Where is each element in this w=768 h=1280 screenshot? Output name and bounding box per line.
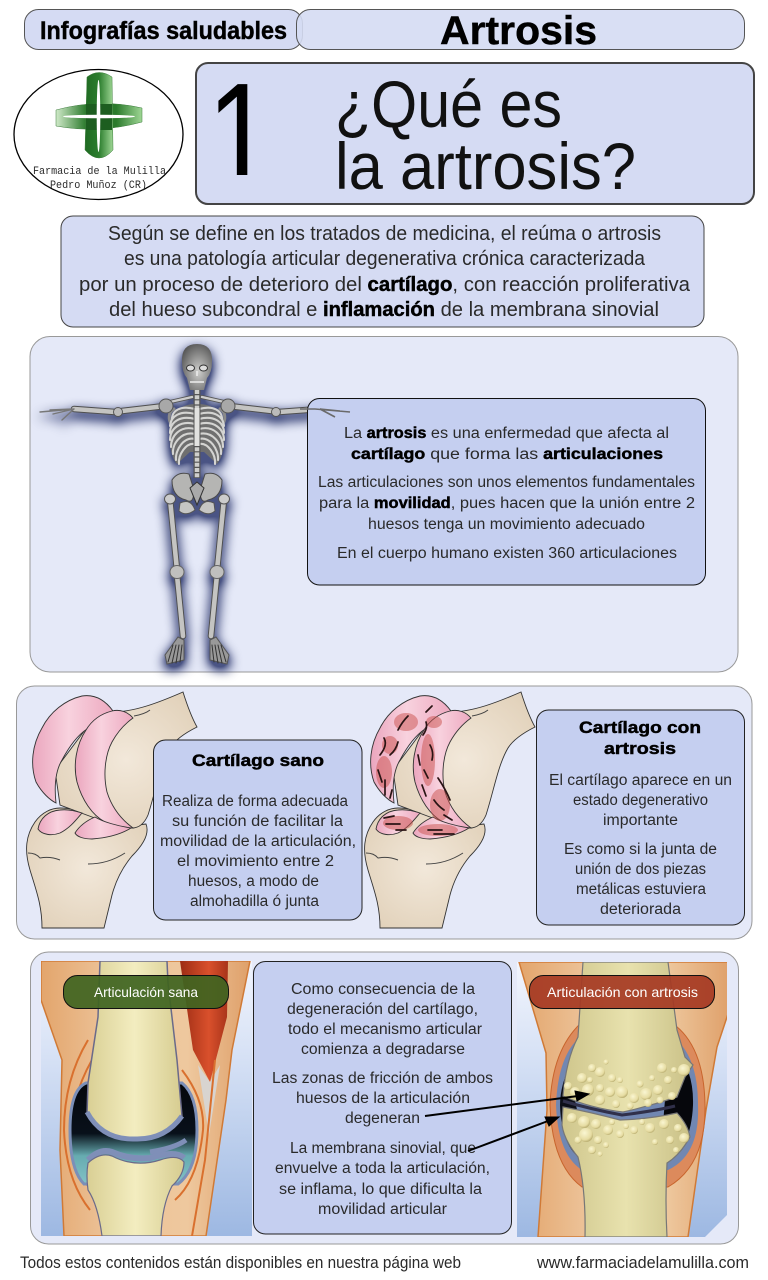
arthritic cartilage box: artrosis bbox=[604, 740, 676, 758]
arthritic cartilage box: unión de dos piezas bbox=[575, 861, 706, 878]
centre explanation box bbox=[254, 962, 512, 1234]
panel: skeleton and joints bbox=[30, 336, 738, 672]
centre explanation box: comienza a degradarse bbox=[301, 1041, 465, 1058]
centre explanation box: La membrana sinovial, que bbox=[290, 1140, 476, 1157]
logo: Farmacia de la Mulilla bbox=[14, 70, 183, 200]
healthy cartilage box: movilidad de la articulación, bbox=[160, 833, 356, 850]
intro definition box: Según se define en los tratados de medicina, el reúma o artrosis bbox=[108, 223, 661, 245]
joints text box: cartílago que forma las articulaciones bbox=[351, 446, 663, 463]
illustration: arthritic knee cartilage bbox=[365, 692, 535, 928]
arthritic cartilage box: deteriorada bbox=[600, 901, 681, 918]
skeleton illustration bbox=[40, 344, 354, 664]
label pill: Articulación sana bbox=[64, 976, 228, 1008]
header pill: Infografías saludables: Infografías saludables bbox=[40, 17, 287, 45]
right hand overlapping the box bbox=[300, 409, 350, 417]
logo: Farmacia de la Mulilla: Pedro Muñoz (CR) bbox=[50, 180, 147, 192]
healthy cartilage box: Cartílago sano bbox=[192, 752, 324, 770]
arrow: synovial membrane bbox=[468, 1117, 559, 1151]
joints text box: Las articulaciones son unos elementos fundamentales bbox=[318, 474, 695, 491]
intro definition box: es una patología articular degenerativa crónica caracterizada bbox=[124, 248, 646, 270]
label pill: Articulación con artrosis bbox=[530, 976, 714, 1008]
centre explanation box: Como consecuencia de la bbox=[291, 981, 475, 998]
arthritic cartilage box: Cartílago con bbox=[579, 719, 701, 737]
header pill: Artrosis: Artrosis bbox=[440, 9, 597, 53]
title: ¿Qué es la artrosis? bbox=[335, 67, 636, 203]
panel: joint comparison bbox=[30, 952, 738, 1244]
centre explanation box: movilidad articular bbox=[318, 1201, 447, 1218]
centre explanation box: huesos de la articulación bbox=[296, 1090, 470, 1107]
label pill: Articulación sana: Articulación sana bbox=[94, 984, 198, 1000]
healthy cartilage box bbox=[154, 740, 362, 920]
title panel bbox=[195, 62, 755, 205]
centre explanation box: Las zonas de fricción de ambos bbox=[272, 1070, 493, 1087]
header pill: Artrosis bbox=[296, 9, 744, 53]
illustration: arthritic joint bbox=[517, 962, 730, 1237]
illustration: healthy knee cartilage bbox=[27, 692, 197, 928]
footer text left: Todos estos contenidos están disponibles en nuestra página web bbox=[20, 1254, 461, 1272]
joints text box bbox=[308, 398, 706, 585]
icon: green cross of rings bbox=[56, 72, 142, 158]
section number: 1 bbox=[207, 53, 273, 218]
intro definition box bbox=[61, 216, 704, 327]
centre explanation box: degeneran bbox=[345, 1110, 420, 1127]
healthy cartilage box: almohadilla ó junta bbox=[190, 893, 319, 910]
centre explanation box: degeneración del cartílago, bbox=[287, 1001, 478, 1018]
centre explanation box: todo el mecanismo articular bbox=[288, 1021, 482, 1038]
joints text box: La artrosis es una enfermedad que afecta al bbox=[344, 425, 669, 442]
joints text box: En el cuerpo humano existen 360 articulaciones bbox=[337, 545, 677, 562]
arthritic cartilage box: Es como si la junta de bbox=[564, 841, 717, 858]
arrow: friction zones bbox=[425, 1091, 589, 1116]
arthritic cartilage box bbox=[536, 710, 744, 925]
arthritic cartilage box: estado degenerativo bbox=[573, 792, 708, 809]
centre explanation box: envuelve a toda la articulación, bbox=[275, 1160, 490, 1177]
joints text box: para la movilidad , pues hacen que la unión entre 2 bbox=[319, 495, 695, 512]
arthritic cartilage box: importante bbox=[603, 812, 678, 829]
healthy cartilage box: el movimiento entre 2 bbox=[177, 853, 334, 870]
illustration: healthy joint bbox=[41, 961, 252, 1236]
logo: Farmacia de la Mulilla: Farmacia de la Mulilla bbox=[33, 166, 166, 178]
intro definition box: del hueso subcondral e inflamación de la membrana sinovial bbox=[109, 299, 659, 321]
title: ¿Qué es la artrosis?: ¿Qué es bbox=[335, 67, 562, 141]
title: ¿Qué es la artrosis?: la artrosis? bbox=[335, 129, 636, 203]
arthritic cartilage box: El cartílago aparece en un bbox=[549, 772, 732, 789]
centre explanation box: se inflama, lo que dificulta la bbox=[279, 1181, 482, 1198]
healthy cartilage box: su función de facilitar la bbox=[172, 813, 343, 830]
arthritic cartilage box: metálicas estuviera bbox=[576, 881, 706, 898]
healthy cartilage box: Realiza de forma adecuada bbox=[162, 793, 348, 810]
intro definition box: por un proceso de deterioro del cartílago, con reacción proliferativa bbox=[79, 274, 691, 296]
panel: cartilage bbox=[16, 686, 752, 939]
footer website: www.farmaciadelamulilla.com bbox=[536, 1254, 749, 1272]
label pill: Articulación con artrosis: Articulación con artrosis bbox=[547, 984, 698, 1000]
joints text box: huesos tenga un movimiento adecuado bbox=[368, 516, 645, 533]
header pill: Infografías saludables bbox=[24, 10, 302, 50]
healthy cartilage box: huesos, a modo de bbox=[188, 873, 319, 890]
